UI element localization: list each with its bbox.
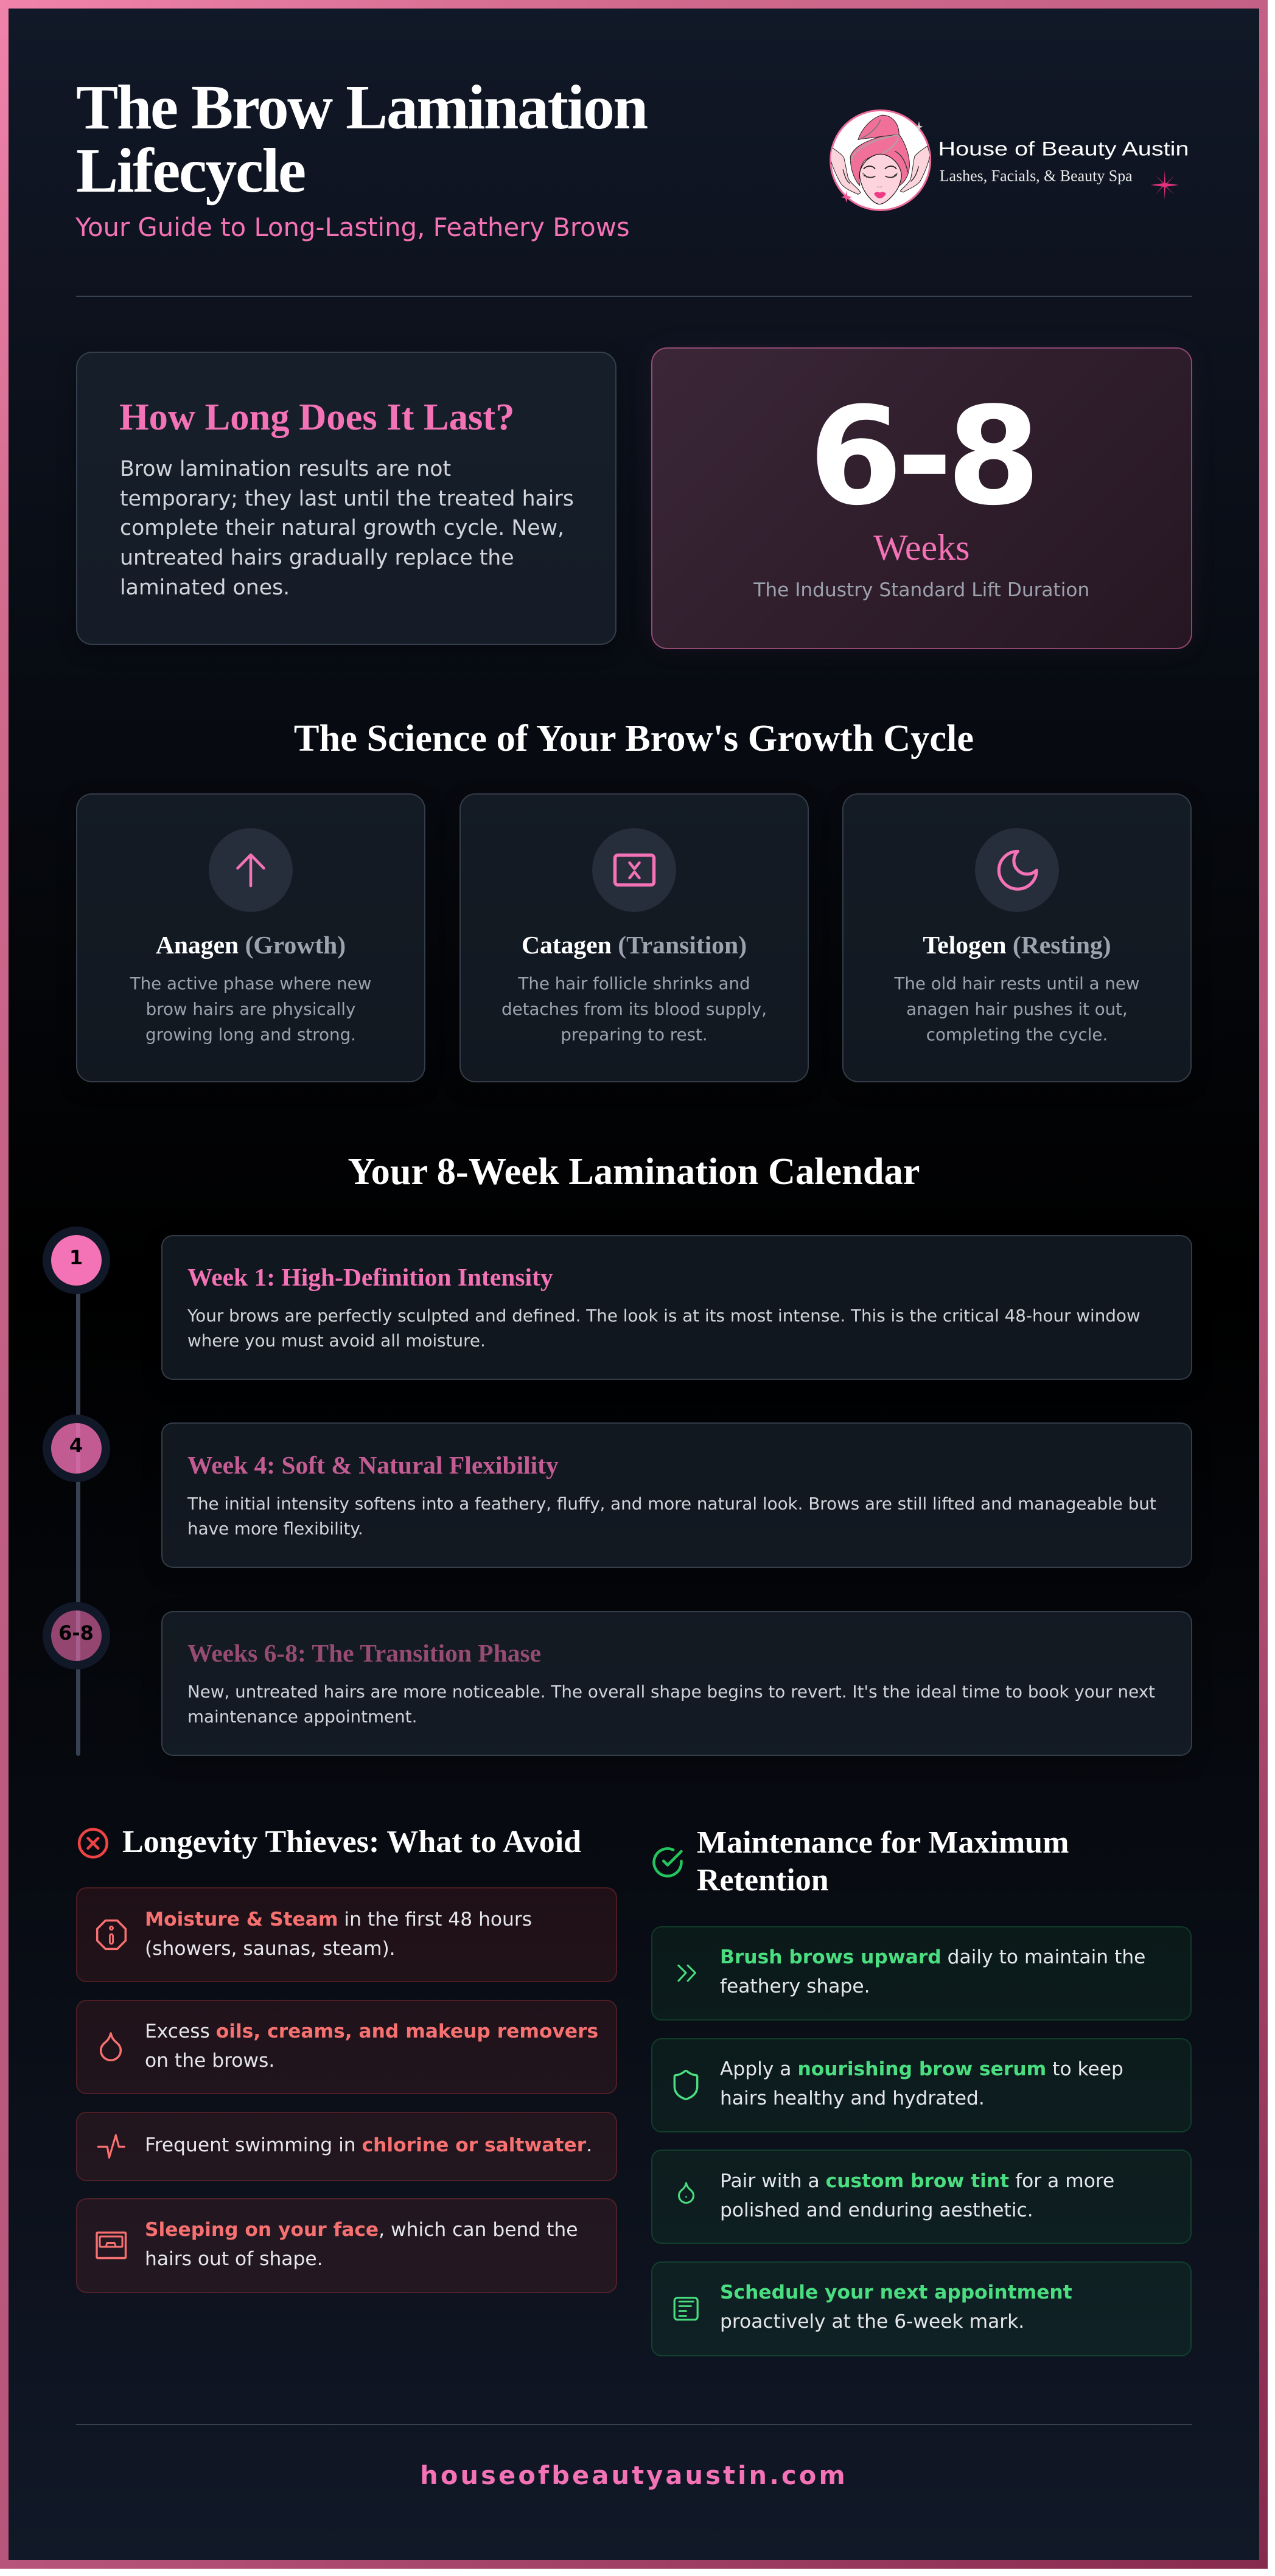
panel: 6-8 weeks stat (651, 347, 1192, 649)
telogen description: completing the cycle. (926, 1025, 1108, 1045)
anagen description: brow hairs are physically (146, 999, 355, 1019)
catagen description (501, 973, 767, 1045)
tint text (720, 2170, 1114, 2221)
panel: what to avoid (76, 1825, 617, 2293)
catagen description: detaches from its blood supply, (501, 999, 767, 1019)
logo: House of Beauty Austin: Lashes, Facials, & Beauty Spa (940, 167, 1133, 185)
icon: droplet with dot (678, 2182, 694, 2204)
moisture text: Moisture & Steam in the first 48 hours (145, 1909, 532, 1930)
panel: anagen (76, 793, 425, 1082)
heading: calendar: Your 8-Week Lamination Calendar (348, 1150, 920, 1192)
serum text: Apply a nourishing brow serum to keep (720, 2058, 1123, 2080)
timeline: 8-week calendar (43, 1227, 1192, 1756)
icon: x circle (78, 1828, 108, 1859)
week 4 text (187, 1494, 1156, 1539)
footer website: houseofbeautyaustin.com (420, 2460, 848, 2490)
icon: octagon info (96, 1919, 127, 1951)
card: week 4 (161, 1422, 1192, 1568)
logo: House of Beauty Austin (830, 110, 1189, 211)
telogen description (894, 973, 1140, 1045)
catagen description: The hair follicle shrinks and (518, 973, 750, 994)
timeline line (76, 1260, 80, 1756)
moisture text: (showers, saunas, steam). (145, 1938, 396, 1960)
footer divider (76, 2424, 1192, 2425)
icon: document list (673, 2297, 699, 2320)
subtitle: Your Guide to Long-Lasting, Feathery Brows (75, 212, 630, 242)
tip: serum (651, 2038, 1192, 2132)
week 1 text: where you must avoid all moisture. (187, 1331, 486, 1351)
header divider (76, 296, 1192, 297)
anagen description (130, 973, 371, 1045)
week 4 text: The initial intensity softens into a feathery, fluffy, and more natural look. Brows are still lifted and manageable but (187, 1494, 1156, 1514)
panel body text: temporary; they last until the treated hairs (120, 487, 574, 511)
panel body text: complete their natural growth cycle. New, (120, 516, 564, 540)
week 1 text (187, 1306, 1141, 1351)
icon: arrow up (209, 828, 293, 912)
schedule text: Schedule your next appointment (720, 2282, 1072, 2303)
brush text: feathery shape. (720, 1976, 870, 1997)
panel: maintenance (651, 1825, 1192, 2356)
icon: box (96, 2232, 127, 2260)
maintenance heading: Retention (697, 1863, 829, 1898)
stat number: 6-8 (809, 378, 1035, 535)
sleeping text (145, 2219, 578, 2270)
avoid: oils (76, 1999, 617, 2094)
tip: tint (651, 2150, 1192, 2244)
avoid heading: Longevity Thieves: What to Avoid (122, 1825, 581, 1859)
card: weeks 6-8 (161, 1611, 1192, 1756)
sleeping text: Sleeping on your face, which can bend the (145, 2219, 578, 2241)
icon: pulse (97, 2134, 125, 2159)
telogen description: The old hair rests until a new (894, 973, 1140, 994)
marker: week 1: 1 (69, 1246, 83, 1269)
weeks 6-8 text (187, 1682, 1155, 1727)
oils text (145, 2021, 598, 2072)
card: week 1 (161, 1235, 1192, 1380)
serum text: hairs healthy and hydrated. (720, 2087, 985, 2109)
catagen title: Catagen (Transition) (522, 931, 747, 959)
logo: House of Beauty Austin: House of Beauty Austin (938, 138, 1189, 160)
icon: check circle (652, 1847, 683, 1878)
catagen description: preparing to rest. (561, 1025, 708, 1045)
panel body text: Brow lamination results are not (120, 457, 451, 481)
marker: week 1 (51, 1235, 101, 1286)
telogen title: Telogen (Resting) (923, 931, 1111, 959)
icon: boxed x (592, 828, 676, 912)
anagen title: Anagen (Growth) (156, 931, 346, 959)
oils text: on the brows. (145, 2050, 274, 2072)
anagen description: The active phase where new (130, 973, 371, 994)
avoid: moisture (76, 1887, 617, 1982)
panel body text: untreated hairs gradually replace the (120, 546, 514, 570)
brush text (720, 1946, 1145, 1997)
tint text: Pair with a custom brow tint for a more (720, 2170, 1114, 2192)
heading: growth cycle: The Science of Your Brow's Growth Cycle (294, 717, 974, 759)
sleeping text: hairs out of shape. (145, 2248, 323, 2270)
title: The Brow Lamination (76, 73, 647, 142)
icon: shield (673, 2070, 699, 2100)
marker: weeks 6-8: 6-8 (58, 1621, 94, 1645)
anagen description: growing long and strong. (145, 1025, 356, 1045)
maintenance heading (697, 1825, 1069, 1898)
stat unit: Weeks (873, 527, 970, 568)
maintenance heading: Maintenance for Maximum (697, 1825, 1069, 1860)
avoid: sleeping (76, 2198, 617, 2293)
weeks 6-8 title: Weeks 6-8: The Transition Phase (187, 1639, 541, 1667)
serum text (720, 2058, 1123, 2109)
panel heading: How Long Does It Last? (119, 395, 514, 438)
title (76, 73, 648, 206)
icon: droplet (100, 2032, 122, 2061)
panel body text: laminated ones. (120, 576, 290, 600)
weeks 6-8 text: New, untreated hairs are more noticeable. The overall shape begins to revert. It's the ideal time to book your next (187, 1682, 1155, 1702)
tip: brush (651, 1926, 1192, 2021)
stat caption: The Industry Standard Lift Duration (753, 579, 1089, 601)
weeks 6-8 text: maintenance appointment. (187, 1707, 417, 1727)
brush text: Brush brows upward daily to maintain the (720, 1946, 1145, 1968)
marker: weeks 6-8 (51, 1610, 101, 1661)
swimming text: Frequent swimming in chlorine or saltwater. (145, 2134, 592, 2156)
title: Lifecycle (76, 136, 305, 206)
icon: chevrons (677, 1965, 696, 1982)
week 1 title: Week 1: High-Definition Intensity (187, 1263, 553, 1291)
moisture text (145, 1909, 532, 1960)
panel: catagen (459, 793, 809, 1082)
week 4 text: have more flexibility. (187, 1519, 363, 1539)
oils text: Excess oils, creams, and makeup removers (145, 2021, 598, 2042)
week 4 title: Week 4: Soft & Natural Flexibility (187, 1451, 559, 1479)
avoid: swimming (76, 2112, 617, 2181)
icon: moon (975, 828, 1059, 912)
schedule text (720, 2278, 1072, 2337)
schedule text: proactively at the 6-week mark. (720, 2311, 1024, 2333)
panel body text (120, 457, 574, 600)
marker: week 4 (51, 1422, 101, 1474)
panel: how long does it last (76, 352, 617, 645)
week 1 text: Your brows are perfectly sculpted and defined. The look is at its most intense. This is the critical 48-hour window (187, 1306, 1141, 1326)
panel: telogen (842, 793, 1192, 1082)
telogen description: anagen hair pushes it out, (906, 999, 1128, 1019)
tip: schedule (651, 2261, 1192, 2356)
tint text: polished and enduring aesthetic. (720, 2199, 1033, 2221)
marker: week 4: 4 (69, 1433, 83, 1457)
